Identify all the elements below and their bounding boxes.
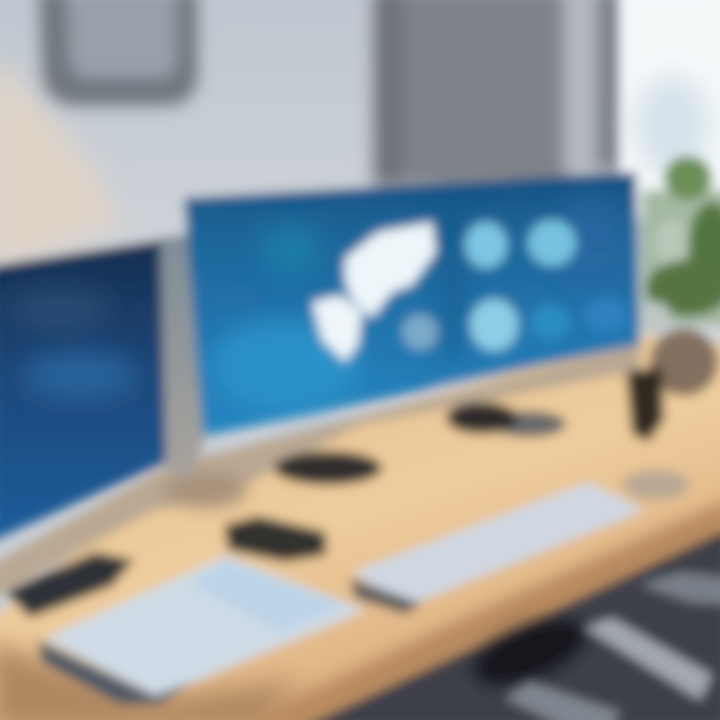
chair slat: upper — [640, 572, 720, 605]
phone — [622, 470, 690, 500]
left monitor bezel — [158, 234, 205, 478]
centre monitor — [184, 172, 640, 436]
window — [620, 0, 720, 220]
desk — [0, 335, 720, 720]
mouse: right — [446, 402, 566, 437]
plant — [639, 156, 720, 334]
desk riser band under monitors — [0, 345, 640, 600]
centre monitor screen — [184, 172, 640, 436]
beige wall patch — [0, 65, 120, 275]
keyboard — [350, 482, 645, 614]
world map — [312, 222, 436, 362]
desk front edge — [240, 498, 720, 720]
chair — [295, 528, 720, 720]
cup — [626, 328, 718, 442]
chair shadow — [465, 605, 595, 699]
notebook — [38, 556, 366, 704]
map small island — [402, 314, 438, 350]
left monitor — [0, 234, 205, 542]
desk lower left shade — [0, 640, 300, 720]
mouse: centre — [274, 451, 382, 485]
dashboard tiles — [465, 220, 627, 351]
desk items — [6, 328, 718, 704]
chair slat: lower — [585, 618, 712, 700]
wall picture frame — [38, 0, 198, 106]
taupe shadow by monitor stand — [163, 472, 247, 508]
background: wall — [0, 0, 720, 390]
mouse: left — [6, 552, 134, 618]
left monitor screen — [0, 240, 166, 542]
grey wall panel — [372, 0, 622, 185]
chair slat: bottom — [505, 682, 620, 720]
remote — [224, 516, 326, 562]
